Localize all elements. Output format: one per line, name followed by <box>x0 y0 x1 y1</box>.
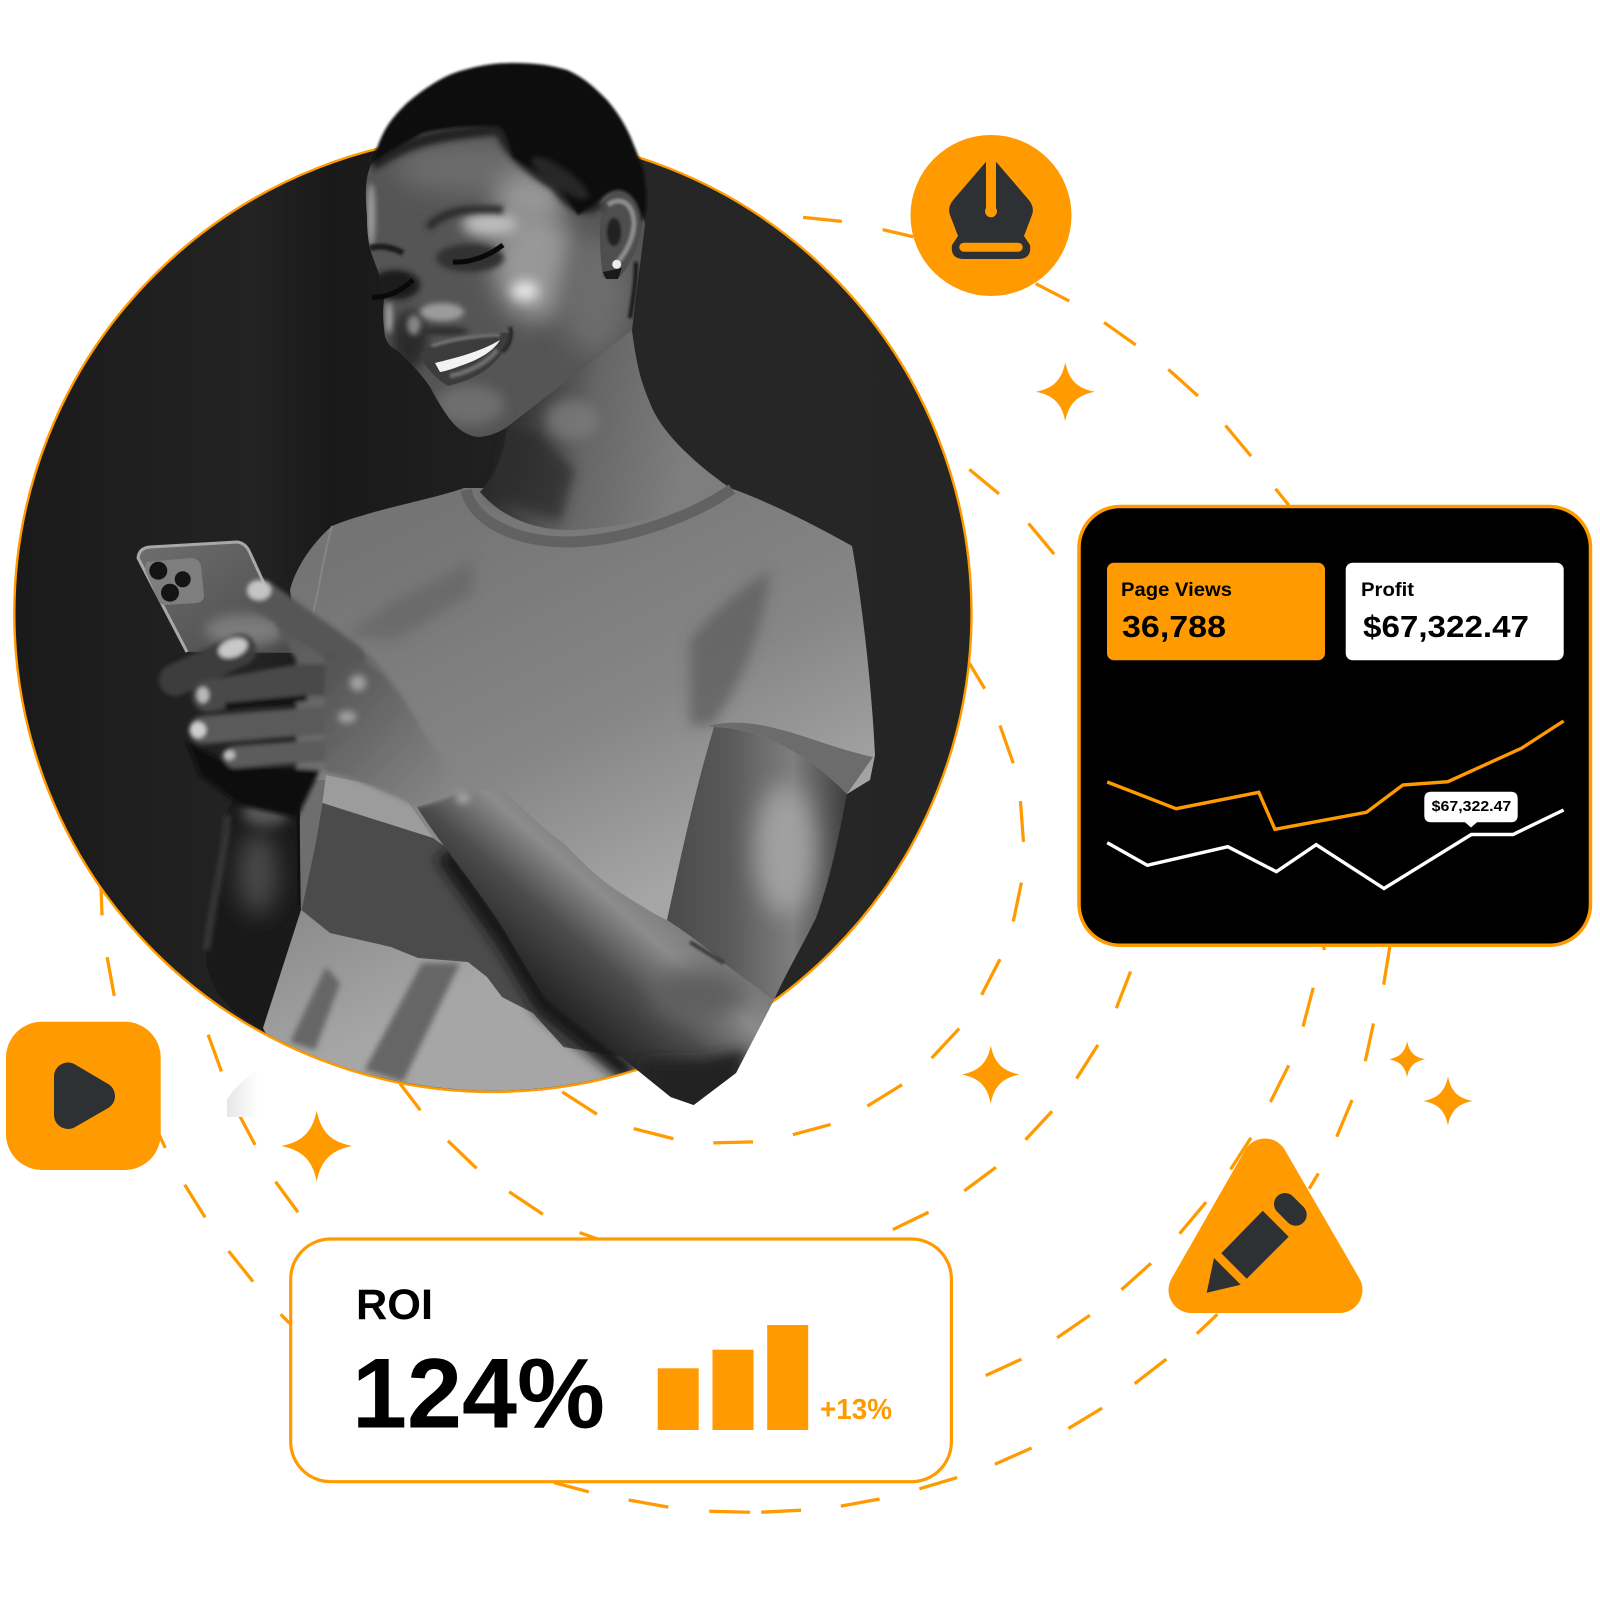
forearm <box>417 790 774 1110</box>
smartphone <box>138 542 297 653</box>
middle finger <box>197 680 340 703</box>
profit tile: $67,322.47 <box>1363 609 1529 644</box>
hands <box>175 580 470 818</box>
side strip of shirt <box>298 780 326 910</box>
play icon <box>6 1022 161 1170</box>
faint grey shadow blob <box>227 1060 272 1117</box>
sparkle star <box>962 1046 1020 1104</box>
t-shirt <box>263 488 875 1100</box>
profit tile <box>1346 563 1564 660</box>
closed eyes <box>453 245 503 262</box>
pen nib icon <box>910 135 1072 296</box>
forearm cast shadow <box>445 853 632 1075</box>
neck <box>466 313 732 542</box>
ROI value: 124% <box>352 1338 605 1448</box>
orange line series <box>1107 721 1564 829</box>
dark circle backdrop <box>14 135 972 1092</box>
sleeve seam <box>312 526 333 613</box>
page views tile <box>1107 563 1325 660</box>
short hair <box>372 63 646 318</box>
back of hand <box>262 600 465 807</box>
right arm <box>417 723 873 1110</box>
ear with earring <box>600 190 642 279</box>
lips and teeth <box>420 333 510 386</box>
skin highlights and shadows <box>367 142 631 425</box>
ROI change: +13% <box>820 1394 892 1426</box>
eyebrows <box>428 209 503 228</box>
page views tile: 36,788 <box>1122 609 1226 644</box>
ROI bar chart <box>658 1325 808 1430</box>
lower shirt fold shadows <box>290 963 460 1082</box>
little finger <box>223 750 345 760</box>
sparkle star <box>281 1110 352 1182</box>
thumb <box>175 634 250 680</box>
page views tile: Page Views <box>1121 580 1232 601</box>
value tooltip: $67,322.47 <box>1432 798 1511 815</box>
dashed orbit arcs <box>101 217 1390 1512</box>
sparkle star <box>1424 1076 1472 1126</box>
value tooltip <box>1424 792 1518 828</box>
profit tile: Profit <box>1361 580 1415 601</box>
ring finger <box>190 720 340 738</box>
palm shadow <box>186 740 320 818</box>
upper arm <box>667 727 847 1000</box>
shadow band <box>301 803 640 1060</box>
ROI panel <box>291 1239 951 1482</box>
finger gap <box>225 698 307 706</box>
woman holding a smartphone <box>138 63 875 1110</box>
knuckle blend <box>325 650 465 807</box>
ROI label: ROI <box>356 1281 433 1329</box>
dashboard panel <box>1079 506 1590 945</box>
knuckles <box>338 675 470 804</box>
sparkle star <box>1036 362 1095 421</box>
index finger <box>247 580 350 658</box>
pencil icon <box>1192 1162 1340 1293</box>
face <box>366 110 645 437</box>
lit stripe <box>322 775 433 838</box>
sparkle star <box>1389 1041 1425 1077</box>
left arm <box>206 780 301 1030</box>
chest fold shadows <box>346 560 770 725</box>
sleeve cuff <box>708 723 873 794</box>
white line series <box>1107 810 1564 888</box>
